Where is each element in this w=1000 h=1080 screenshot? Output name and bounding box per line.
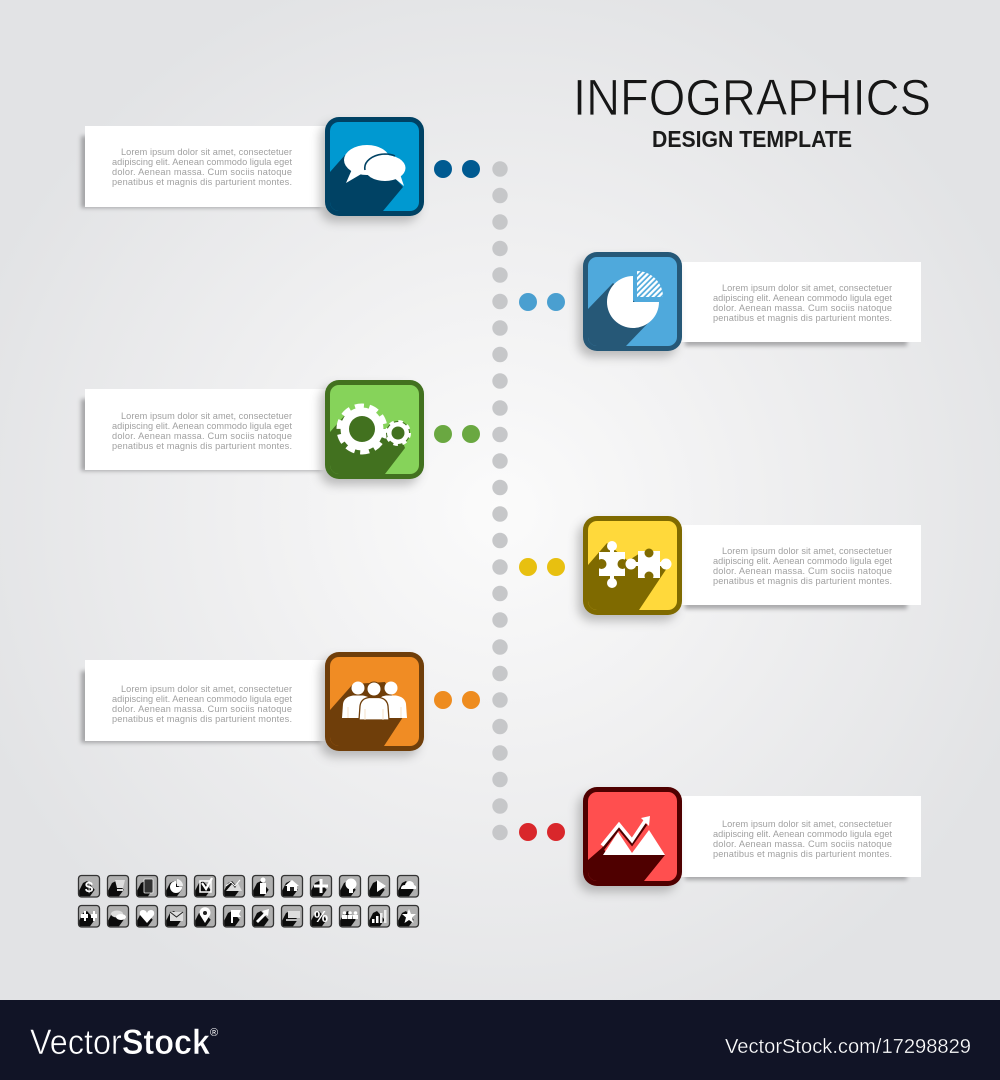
small icon: plus: [310, 876, 332, 897]
text card 1: [81, 126, 327, 208]
small icon: play: [368, 876, 390, 897]
panel: step 3 gears: [81, 380, 480, 485]
text card 4: penatibus et magnis dis parturient montes.: [713, 576, 892, 586]
text card 5: Lorem ipsum dolor sit amet, consectetuer: [121, 684, 292, 694]
text card 2: adipiscing elit. Aenean commodo ligula eget: [713, 293, 892, 303]
text card 5: penatibus et magnis dis parturient montes.: [112, 714, 292, 724]
text card 1: penatibus et magnis dis parturient montes.: [112, 177, 292, 187]
icon tile: pie chart: [578, 252, 682, 357]
panel: step 6 growth: [519, 787, 921, 892]
small icon: percent: %: [314, 909, 328, 926]
small icon: dollar: [78, 876, 100, 897]
text card 4: adipiscing elit. Aenean commodo ligula eget: [713, 556, 892, 566]
small icon: cloud: [398, 876, 418, 897]
small icon: flag: [224, 906, 244, 927]
text card 2: penatibus et magnis dis parturient montes.: [713, 313, 892, 323]
small icon: pin: [194, 906, 216, 927]
panel: step 4 puzzle: [519, 516, 921, 621]
small icon: check: [194, 876, 216, 897]
text card 3: dolor. Aenean massa. Cum sociis natoque: [112, 431, 292, 441]
connector dots 6: [519, 823, 565, 841]
small icon: heart: [136, 906, 158, 927]
text card 2: [680, 262, 921, 346]
small icon: bars: [368, 906, 390, 927]
small icon: person: [252, 876, 274, 897]
footer logo: VectorStock: [30, 1023, 210, 1062]
text card 3: adipiscing elit. Aenean commodo ligula eget: [112, 421, 292, 431]
small icon: arrow: [252, 906, 274, 927]
icon tile: puzzle pieces: [578, 516, 682, 621]
footer url: VectorStock.com/17298829: [725, 1036, 971, 1058]
text card 6: penatibus et magnis dis parturient montes.: [713, 849, 892, 859]
text card 6: [680, 796, 921, 880]
connector dots 2: [519, 293, 565, 311]
small icon: dollar: $: [85, 879, 94, 896]
small icon: phone: [136, 876, 158, 897]
icon tile: gears: [320, 380, 424, 485]
text card 5: [81, 660, 327, 743]
timeline: gray dotted spine: [492, 161, 508, 840]
subtitle: DESIGN TEMPLATE: [652, 126, 852, 152]
footer bar: [0, 1000, 1000, 1080]
text card 2: dolor. Aenean massa. Cum sociis natoque: [713, 303, 892, 313]
icon tile: mountain chart: [578, 787, 682, 892]
text card 6: adipiscing elit. Aenean commodo ligula eget: [713, 829, 892, 839]
title: INFOGRAPHICS: [573, 69, 931, 126]
registered mark: ®: [210, 1027, 218, 1039]
small icon: house: [282, 876, 302, 897]
small icon: people: [340, 906, 360, 927]
small icon: bulb: [340, 876, 360, 897]
icon tile: speech bubbles: [320, 117, 424, 222]
text card 3: [81, 389, 327, 471]
small icon: star: [398, 906, 418, 927]
panel: step 1 chat: [81, 117, 480, 222]
text card 2: Lorem ipsum dolor sit amet, consectetuer: [722, 283, 892, 293]
panel: step 5 team: [81, 652, 480, 757]
small icon: laptop: [282, 906, 302, 927]
connector dots 5: [434, 691, 480, 709]
text card 4: dolor. Aenean massa. Cum sociis natoque: [713, 566, 892, 576]
connector dots 4: [519, 558, 565, 576]
small icon: mountains: [224, 876, 244, 897]
panel: step 2 pie chart: [519, 252, 921, 357]
text card 1: adipiscing elit. Aenean commodo ligula eget: [112, 157, 292, 167]
small icon: chat: [108, 906, 128, 927]
connector dots 1: [434, 160, 480, 178]
text card 1: dolor. Aenean massa. Cum sociis natoque: [112, 167, 292, 177]
small icon: puzzle: [78, 906, 100, 927]
icon tile: people: [320, 652, 424, 757]
text card 6: Lorem ipsum dolor sit amet, consectetuer: [722, 819, 892, 829]
text card 6: dolor. Aenean massa. Cum sociis natoque: [713, 839, 892, 849]
text card 5: adipiscing elit. Aenean commodo ligula eget: [112, 694, 292, 704]
text card 3: Lorem ipsum dolor sit amet, consectetuer: [121, 411, 292, 421]
text card 1: Lorem ipsum dolor sit amet, consectetuer: [121, 147, 292, 157]
small icon: percent: [310, 906, 332, 927]
connector dots 3: [434, 425, 480, 443]
small icon: mail: [166, 906, 186, 927]
text card 3: penatibus et magnis dis parturient montes.: [112, 441, 292, 451]
small icon: cart: [108, 876, 128, 897]
text card 4: [680, 525, 921, 609]
small icon: pie: [166, 876, 186, 897]
text card 4: Lorem ipsum dolor sit amet, consectetuer: [722, 546, 892, 556]
icon strip: small icon set: [78, 876, 418, 927]
text card 5: dolor. Aenean massa. Cum sociis natoque: [112, 704, 292, 714]
